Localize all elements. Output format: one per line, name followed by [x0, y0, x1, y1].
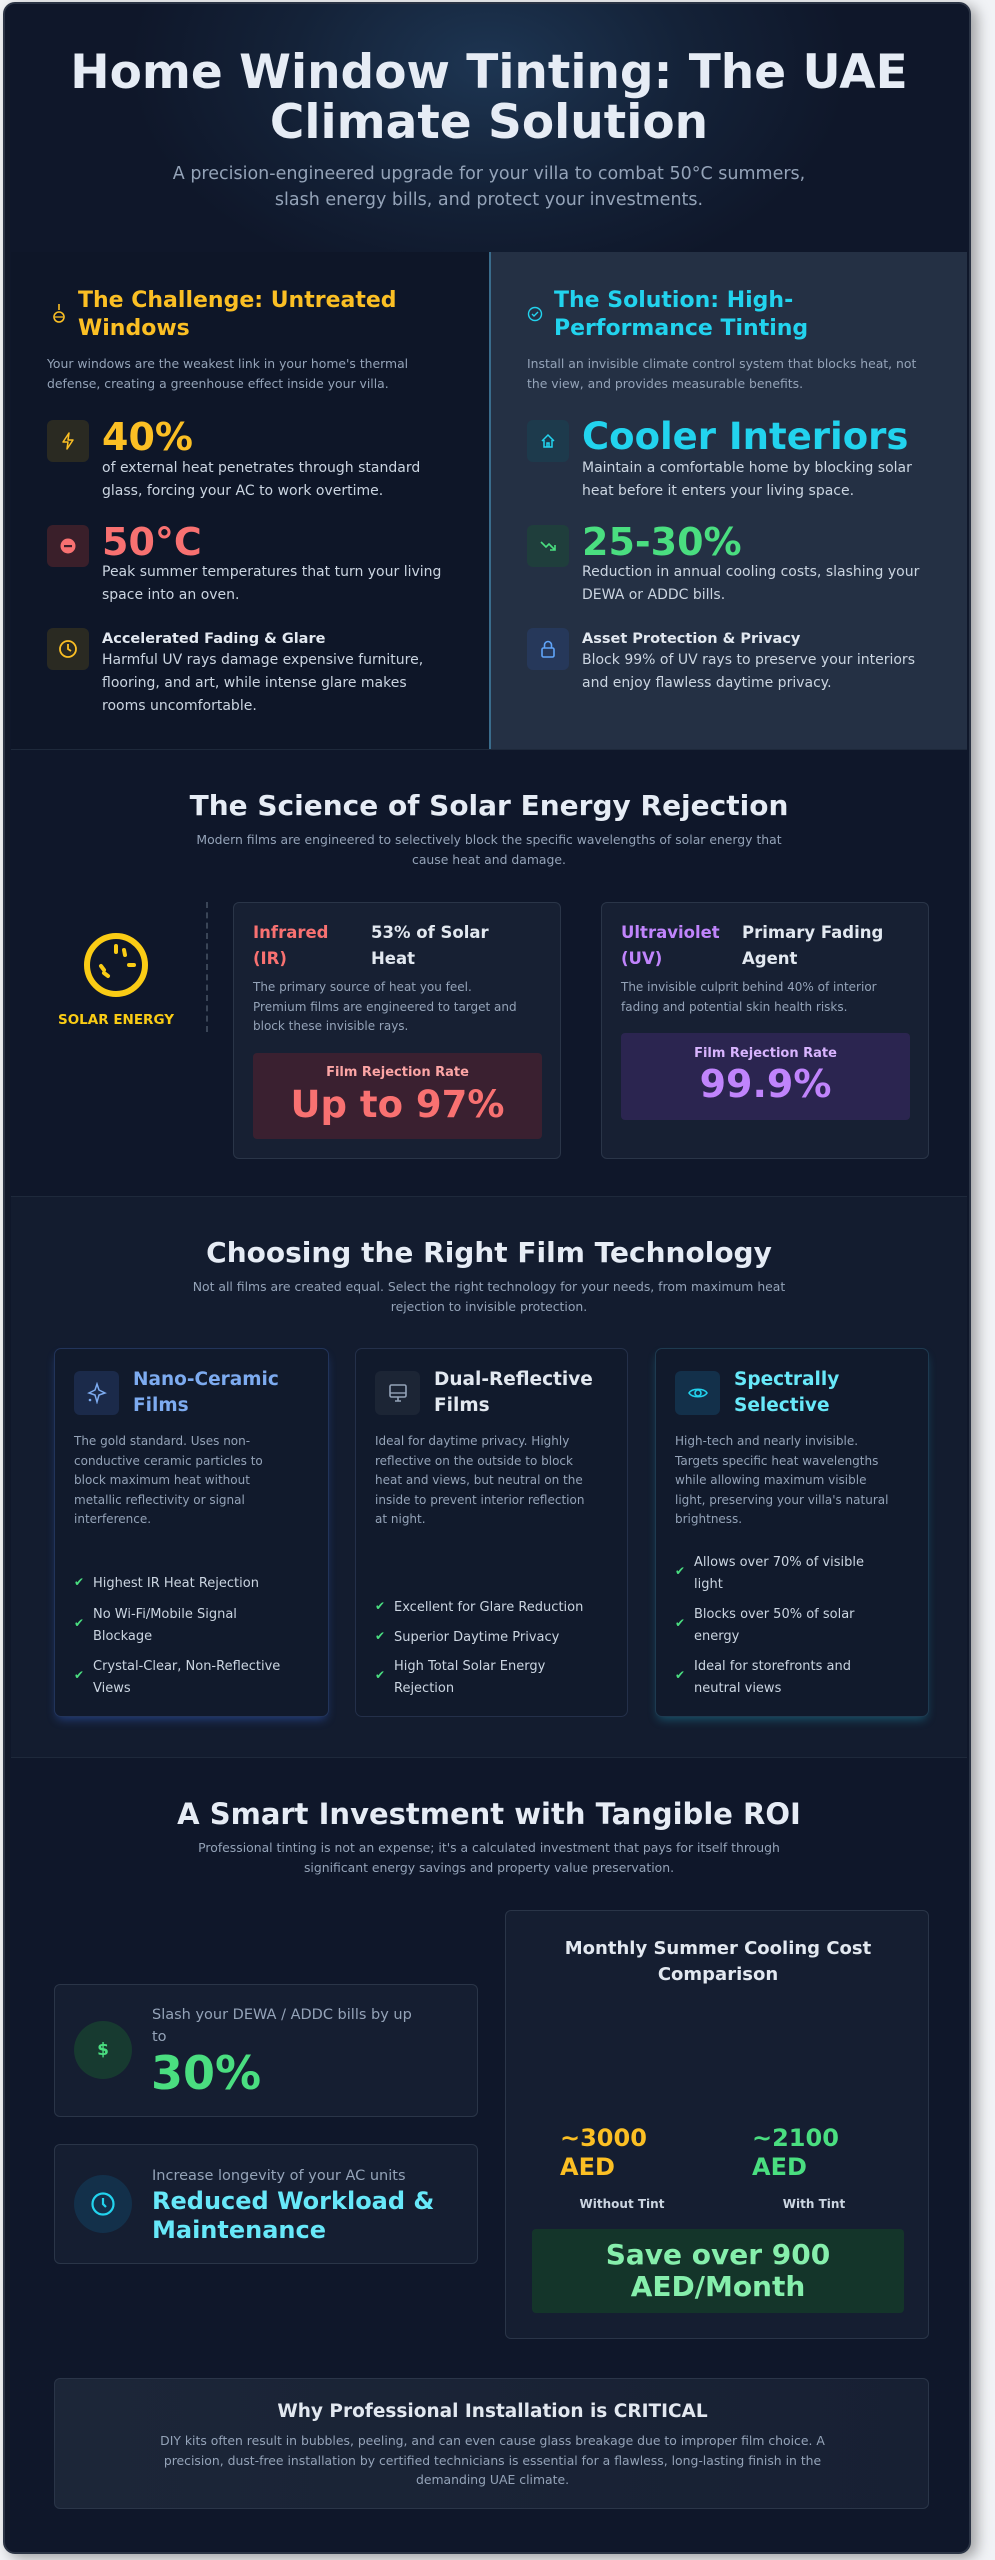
- card: AC longevity: Reduced Workload &: [152, 2187, 434, 2215]
- stat: 25-30%: 25-30%: [582, 520, 742, 564]
- heading: The Challenge: Untreated: [78, 288, 397, 313]
- stat: fading: Harmful UV rays damage expensive furniture,: [102, 652, 423, 668]
- icon: trend down: [527, 525, 569, 567]
- card: bill savings: Slash your DEWA / ADDC bills by up: [152, 2007, 412, 2023]
- callout: IR rejection: Up to 97%: [291, 1083, 504, 1126]
- stat: 40%: 40%: [102, 415, 193, 459]
- card: nano-ceramic: ✔: [74, 1575, 84, 1589]
- bar value: without tint: AED: [560, 2153, 615, 2181]
- subtitle: [173, 164, 805, 210]
- stat: 50C: 50°C: [102, 520, 202, 564]
- card: AC longevity: Maintenance: [152, 2216, 326, 2244]
- card: infrared: The primary source of heat you feel.: [253, 980, 472, 994]
- subheading: Modern films are engineered to selectively block the specific wavelengths of solar energy that: [196, 832, 782, 847]
- callout: savings: AED/Month: [631, 2270, 805, 2303]
- stat: 40%: of external heat penetrates through standard: [102, 460, 420, 476]
- chart: cooling cost comparison: Monthly Summer Cooling Cost: [565, 1938, 871, 1959]
- card: spectrally selective: Blocks over 50% of solar: [694, 1607, 855, 1622]
- card: ultraviolet: (UV): [621, 949, 662, 968]
- callout: IR rejection: Film Rejection Rate: [326, 1065, 469, 1080]
- stat: 25-30%: [527, 520, 920, 603]
- heading: Choosing the Right Film Technology: [206, 1236, 772, 1269]
- stat: cooler: Maintain a comfortable home by blocking solar: [582, 460, 912, 476]
- subheading: significant energy savings and property value preservation.: [304, 1860, 674, 1874]
- callout: UV rejection: 99.9%: [700, 1062, 831, 1106]
- card: nano-ceramic: No Wi-Fi/Mobile Signal: [93, 1607, 237, 1622]
- panel: challenge: [11, 252, 489, 749]
- card: ultraviolet: Primary Fading: [742, 923, 883, 942]
- card: dual-reflective: Films: [434, 1395, 490, 1416]
- card: ultraviolet: [601, 902, 929, 1159]
- intro text: defense, creating a greenhouse effect inside your villa.: [47, 376, 389, 391]
- subheading: [193, 1279, 785, 1314]
- card: nano-ceramic: metallic reflectivity or signal: [74, 1492, 245, 1506]
- stat: cooler: heat before it enters your living space.: [582, 483, 854, 499]
- card: spectrally selective: Spectrally: [734, 1369, 839, 1390]
- section: film technology: [11, 1196, 967, 1758]
- card: dual-reflective: Superior Daytime Privacy: [394, 1630, 559, 1645]
- subtitle: A precision-engineered upgrade for your villa to combat 50°C summers,: [173, 164, 805, 184]
- stat: 40%: [47, 415, 420, 499]
- callout: UV rejection: [621, 1033, 910, 1120]
- icon: lock: [527, 628, 569, 670]
- stat: 50C: space into an oven.: [102, 587, 239, 603]
- stat: cooler: Cooler Interiors: [582, 415, 908, 458]
- card: infrared: block these invisible rays.: [253, 1019, 408, 1033]
- title: Home Window Tinting: The UAE: [70, 45, 908, 100]
- card: nano-ceramic: conductive ceramic particles to: [74, 1454, 263, 1468]
- card: nano-ceramic: Blockage: [93, 1629, 152, 1644]
- icon: dollar: [74, 2021, 132, 2079]
- card: bill savings: [54, 1984, 478, 2117]
- card: dual-reflective: Ideal for daytime privacy. Highly: [375, 1434, 569, 1448]
- icon: house: [527, 420, 569, 462]
- subheading: Not all films are created equal. Select the right technology for your needs, from maximum heat: [193, 1279, 785, 1294]
- card: dual-reflective: ✔: [375, 1629, 385, 1643]
- heading: The Science of Solar Energy Rejection: [190, 789, 788, 822]
- card: nano-ceramic: Nano-Ceramic: [133, 1369, 279, 1390]
- bar value: without tint: ~3000: [560, 2124, 647, 2152]
- card: spectrally selective: ✔: [675, 1668, 685, 1682]
- stat: privacy: Block 99% of UV rays to preserve your interiors: [582, 652, 915, 668]
- icon: clock: [74, 2175, 132, 2233]
- card: bill savings: 30%: [151, 2046, 261, 2100]
- heading: Windows: [78, 316, 190, 341]
- card: infrared: 53% of Solar: [371, 923, 489, 942]
- callout: professional installation: Why Professional Installation is CRITICAL: [277, 2401, 708, 2422]
- icon: dollar: $: [97, 2040, 109, 2060]
- callout: IR rejection: [253, 1053, 542, 1139]
- chart: cooling cost comparison: Without Tint: [580, 2197, 664, 2211]
- card: dual-reflective: Dual-Reflective: [434, 1369, 593, 1390]
- title: Climate Solution: [270, 95, 708, 150]
- stat: 25-30%: Reduction in annual cooling costs, slashing your: [582, 564, 919, 580]
- subheading: [198, 1840, 780, 1874]
- bar value: with tint: ~2100: [752, 2124, 839, 2152]
- card: dual-reflective: heat and views, but neutral on the: [375, 1473, 583, 1487]
- icon: bulb: [53, 304, 65, 323]
- card: dual-reflective: High Total Solar Energy: [394, 1659, 545, 1674]
- stat: 25-30%: DEWA or ADDC bills.: [582, 587, 725, 603]
- header: [5, 4, 973, 252]
- card: ultraviolet: fading and potential skin health risks.: [621, 1000, 847, 1014]
- card: nano-ceramic: The gold standard. Uses non-: [74, 1434, 250, 1448]
- card: spectrally selective: Allows over 70% of visible: [694, 1555, 864, 1570]
- card: infrared: Premium films are engineered to target and: [253, 1000, 517, 1014]
- card: ultraviolet: The invisible culprit behind 40% of interior: [621, 980, 877, 994]
- stat: fading: rooms uncomfortable.: [102, 698, 257, 714]
- card: spectrally selective: neutral views: [694, 1681, 781, 1696]
- intro text: Install an invisible climate control system that blocks heat, not: [527, 356, 916, 371]
- chart: cooling cost comparison: With Tint: [783, 2197, 845, 2211]
- intro text: the view, and provides measurable benefits.: [527, 376, 803, 391]
- card: infrared: [233, 902, 561, 1159]
- card: spectrally selective: ✔: [675, 1564, 685, 1578]
- card: spectrally selective: High-tech and nearly invisible.: [675, 1434, 858, 1448]
- bar value: without tint: [560, 2124, 647, 2181]
- stat: 40%: glass, forcing your AC to work overtime.: [102, 483, 383, 499]
- chart: cooling cost comparison: [505, 1910, 929, 2339]
- card: dual-reflective: inside to prevent interior reflection: [375, 1492, 584, 1506]
- card: dual-reflective: [355, 1348, 628, 1717]
- heading: Performance Tinting: [554, 316, 808, 341]
- card: AC longevity: Increase longevity of your AC units: [152, 2168, 406, 2184]
- card: nano-ceramic: ✔: [74, 1668, 84, 1682]
- card: nano-ceramic: block maximum heat without: [74, 1473, 250, 1487]
- icon: check circle: [528, 306, 542, 322]
- subtitle: slash energy bills, and protect your investments.: [275, 190, 703, 210]
- callout: professional installation: precision, dust-free installation by certified technicians is essential for a flawless, long-lasting finish in the: [164, 2452, 821, 2468]
- card: nano-ceramic: Highest IR Heat Rejection: [93, 1576, 259, 1591]
- icon: no entry: [47, 525, 89, 567]
- card: spectrally selective: ✔: [675, 1616, 685, 1630]
- heading: A Smart Investment with Tangible ROI: [177, 1797, 801, 1831]
- card: nano-ceramic: interference.: [74, 1512, 151, 1526]
- card: spectrally selective: Ideal for storefronts and: [694, 1659, 851, 1674]
- card: nano-ceramic: ✔: [74, 1616, 84, 1630]
- icon: sun: [58, 933, 174, 1028]
- chart: cooling cost comparison: Comparison: [658, 1964, 778, 1985]
- card: infrared: (IR): [253, 949, 287, 968]
- callout: UV rejection: Film Rejection Rate: [694, 1046, 837, 1061]
- card: nano-ceramic: Views: [93, 1681, 131, 1696]
- card: nano-ceramic: Films: [133, 1395, 189, 1416]
- section: ROI: [54, 1797, 929, 2509]
- stat: cooler: [527, 415, 912, 499]
- card: infrared: Heat: [371, 949, 415, 968]
- card: AC longevity: [54, 2144, 478, 2264]
- card: bill savings: to: [152, 2029, 167, 2045]
- card: ultraviolet: Ultraviolet: [621, 923, 720, 942]
- icon: sun: SOLAR ENERGY: [58, 1012, 174, 1028]
- stat: 50C: Peak summer temperatures that turn your living: [102, 564, 441, 580]
- card: spectrally selective: light: [694, 1577, 723, 1592]
- subheading: rejection to invisible protection.: [391, 1298, 587, 1314]
- card: dual-reflective: Rejection: [394, 1681, 454, 1696]
- card: ultraviolet: Agent: [742, 949, 797, 968]
- intro text: [527, 356, 916, 391]
- heading: The Solution: High-: [554, 288, 793, 313]
- card: spectrally selective: while allowing maximum visible: [675, 1473, 866, 1487]
- intro text: [47, 356, 408, 391]
- subheading: [196, 832, 782, 866]
- title: [70, 45, 908, 150]
- card: infrared: Infrared: [253, 923, 328, 942]
- card: spectrally selective: [655, 1348, 929, 1717]
- card: nano-ceramic: Crystal-Clear, Non-Reflective: [93, 1659, 280, 1674]
- section: science: [11, 749, 967, 1196]
- stat: fading: flooring, and art, while intense glare makes: [102, 675, 407, 691]
- bar value: with tint: [752, 2124, 839, 2181]
- callout: professional installation: demanding UAE climate.: [416, 2472, 569, 2487]
- icon: bolt: [47, 420, 89, 462]
- card: dual-reflective: Excellent for Glare Reduction: [394, 1600, 583, 1615]
- card: spectrally selective: energy: [694, 1629, 739, 1644]
- stat: privacy: [527, 628, 915, 691]
- icon: clock: [47, 628, 89, 670]
- card: dual-reflective: at night.: [375, 1512, 426, 1526]
- heading: [554, 288, 808, 341]
- card: spectrally selective: light, preserving your villa's natural: [675, 1492, 888, 1506]
- card: dual-reflective: ✔: [375, 1599, 385, 1613]
- callout: professional installation: DIY kits often result in bubbles, peeling, and can even cause glass breakage due to improper film choice. A: [160, 2433, 825, 2448]
- bar value: with tint: AED: [752, 2153, 807, 2181]
- stat: fading: [47, 628, 423, 714]
- heading: [78, 288, 397, 341]
- intro text: Your windows are the weakest link in your home's thermal: [47, 356, 408, 371]
- card: spectrally selective: Selective: [734, 1395, 830, 1416]
- stat: privacy: and enjoy flawless daytime privacy.: [582, 675, 832, 691]
- card: spectrally selective: Targets specific heat wavelengths: [675, 1454, 878, 1468]
- stat: fading: Accelerated Fading & Glare: [102, 631, 325, 647]
- card: nano-ceramic: [54, 1348, 329, 1717]
- stat: privacy: Asset Protection & Privacy: [582, 631, 800, 647]
- callout: savings: Save over 900: [606, 2238, 830, 2271]
- stat: 50C: [47, 520, 441, 603]
- subheading: cause heat and damage.: [412, 852, 566, 866]
- card: dual-reflective: ✔: [375, 1668, 385, 1682]
- card: dual-reflective: reflective on the outside to block: [375, 1454, 573, 1468]
- callout: savings: [532, 2229, 904, 2313]
- card: spectrally selective: brightness.: [675, 1512, 742, 1526]
- panel: solution: [489, 252, 967, 749]
- callout: professional installation: [54, 2378, 929, 2509]
- subheading: Professional tinting is not an expense; it's a calculated investment that pays for itself through: [198, 1840, 780, 1855]
